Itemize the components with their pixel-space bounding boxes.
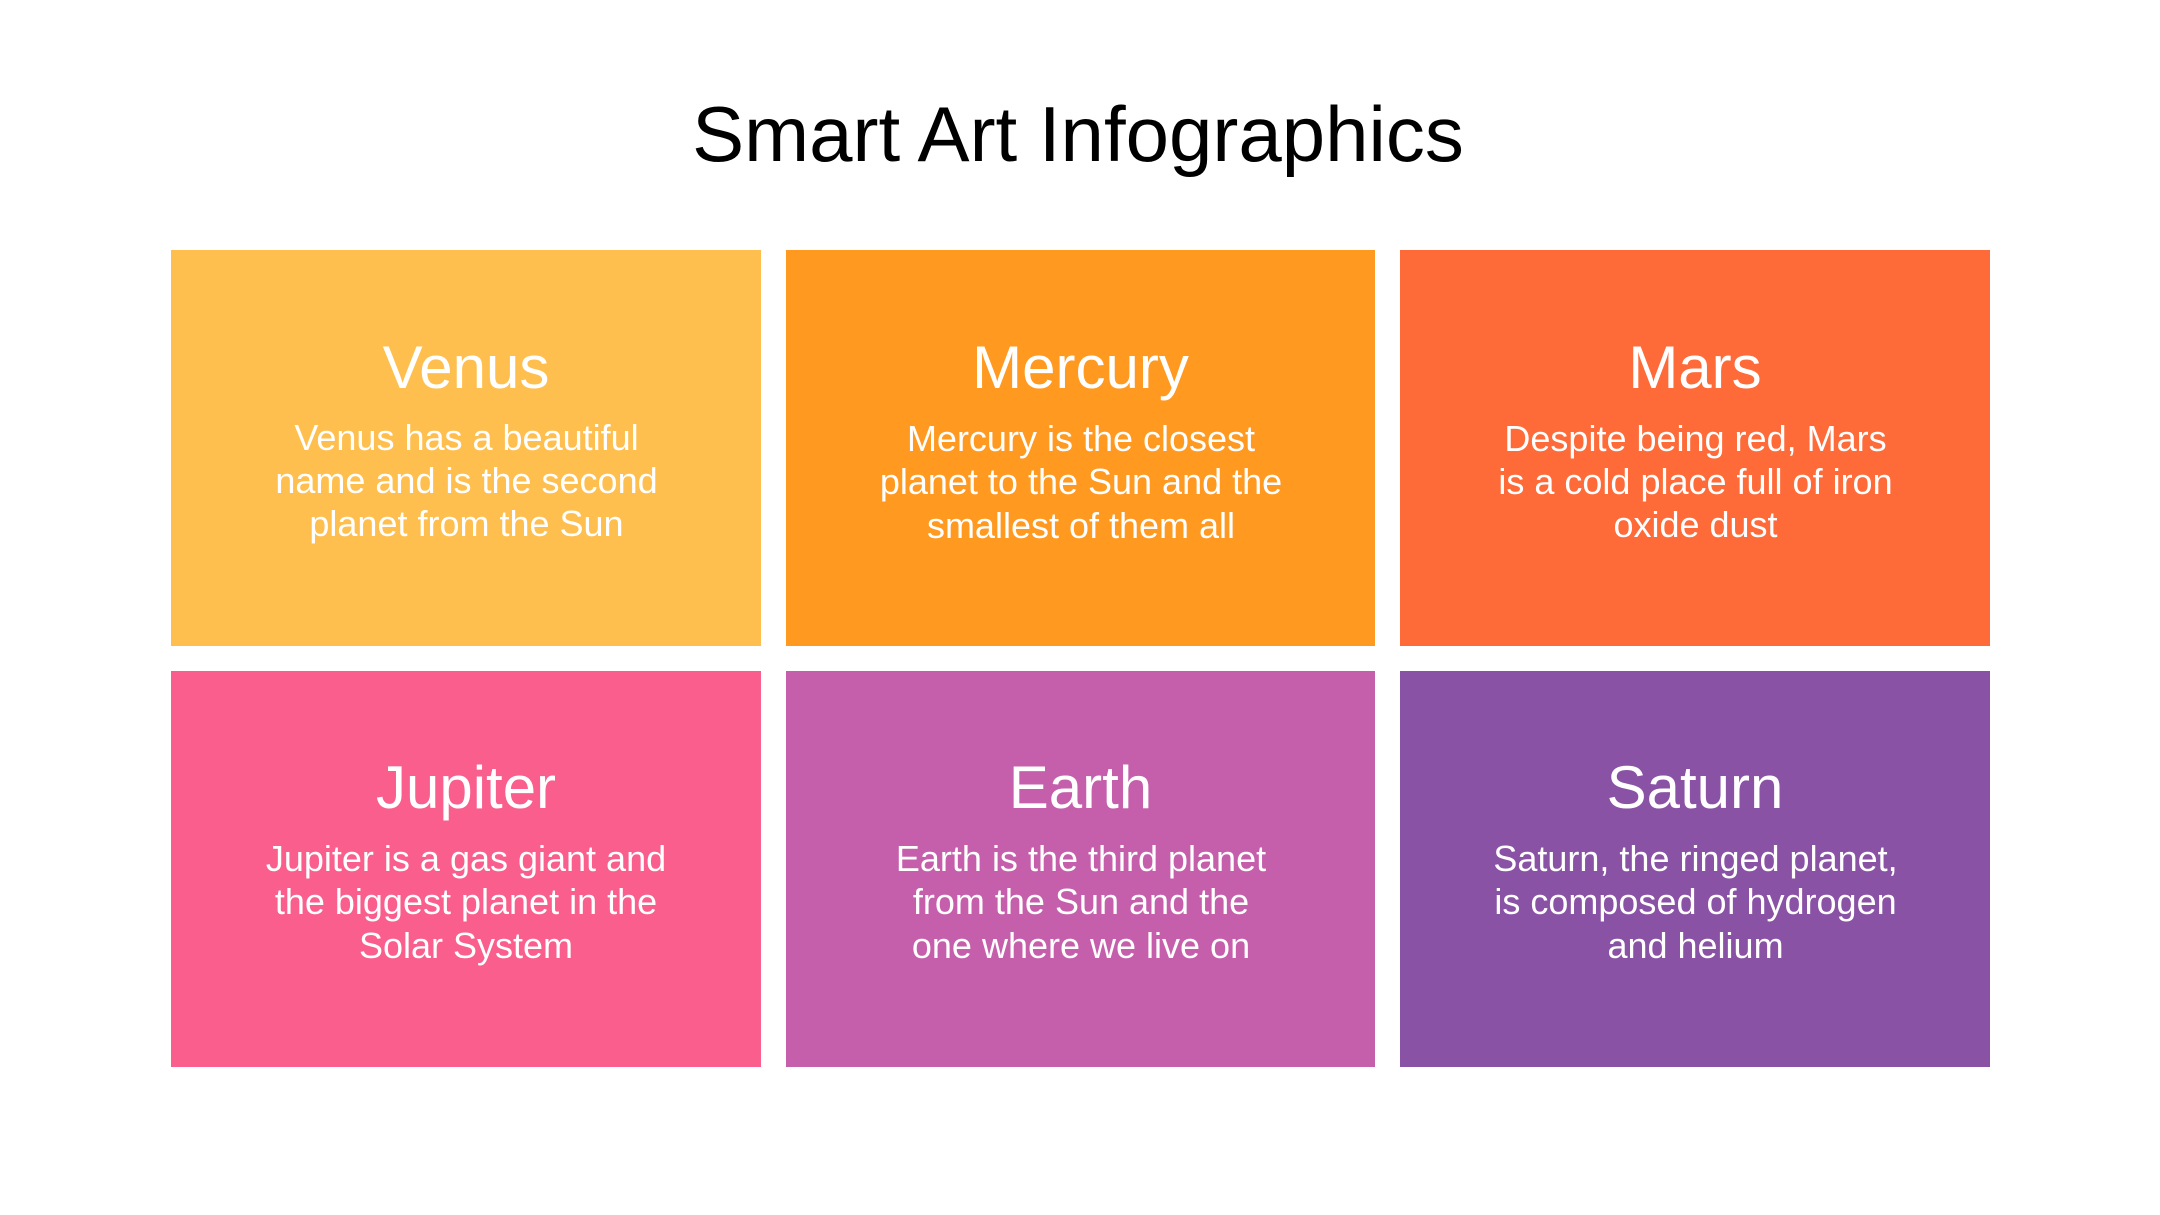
text: Saturn description xyxy=(1493,838,1898,966)
text: Mars description xyxy=(1498,418,1893,545)
text: Saturn description: and helium xyxy=(1607,925,1784,966)
heading: Venus: Venus xyxy=(383,334,549,401)
heading: Earth: Earth xyxy=(1009,754,1152,821)
text: Earth description xyxy=(896,838,1266,966)
text: Venus description: planet from the Sun xyxy=(309,503,624,544)
panel: Earth xyxy=(786,671,1375,1067)
text: Mars description: Despite being red, Mars xyxy=(1504,418,1887,458)
panel: Jupiter xyxy=(171,671,761,1067)
panel: Mars xyxy=(1400,250,1990,646)
heading: Saturn: Saturn xyxy=(1607,754,1783,821)
panel: Mercury xyxy=(786,250,1375,646)
panel: Venus xyxy=(171,250,761,646)
text: Earth description: from the Sun and the xyxy=(913,881,1249,922)
text: Mercury description: Mercury is the closest xyxy=(907,418,1255,459)
heading: Mars: Mars xyxy=(1628,334,1762,401)
text: Saturn description: Saturn, the ringed planet, xyxy=(1493,838,1898,879)
text: Earth description: Earth is the third planet xyxy=(896,838,1266,879)
text: Saturn description: is composed of hydrogen xyxy=(1494,881,1897,922)
text: Mars description: is a cold place full of iron xyxy=(1498,461,1893,502)
text: Mercury description: smallest of them all xyxy=(927,505,1235,546)
text: Venus description: Venus has a beautiful xyxy=(294,417,639,458)
heading: Jupiter: Jupiter xyxy=(376,754,556,821)
text: Mars description: oxide dust xyxy=(1613,504,1778,545)
text: Jupiter description: Jupiter is a gas giant and xyxy=(266,838,666,879)
text: Mercury description: planet to the Sun and the xyxy=(880,461,1282,502)
text: Mercury description xyxy=(880,418,1282,546)
title: Smart Art Infographics xyxy=(692,90,1464,178)
text: Venus description: name and is the second xyxy=(275,460,658,501)
heading: Mercury: Mercury xyxy=(972,334,1189,401)
text: Jupiter description xyxy=(266,838,666,966)
panel: Saturn xyxy=(1400,671,1990,1067)
text: Jupiter description: Solar System xyxy=(359,925,573,966)
text: Venus description xyxy=(275,417,658,544)
text: Earth description: one where we live on xyxy=(912,925,1250,966)
text: Jupiter description: the biggest planet in the xyxy=(275,881,657,922)
